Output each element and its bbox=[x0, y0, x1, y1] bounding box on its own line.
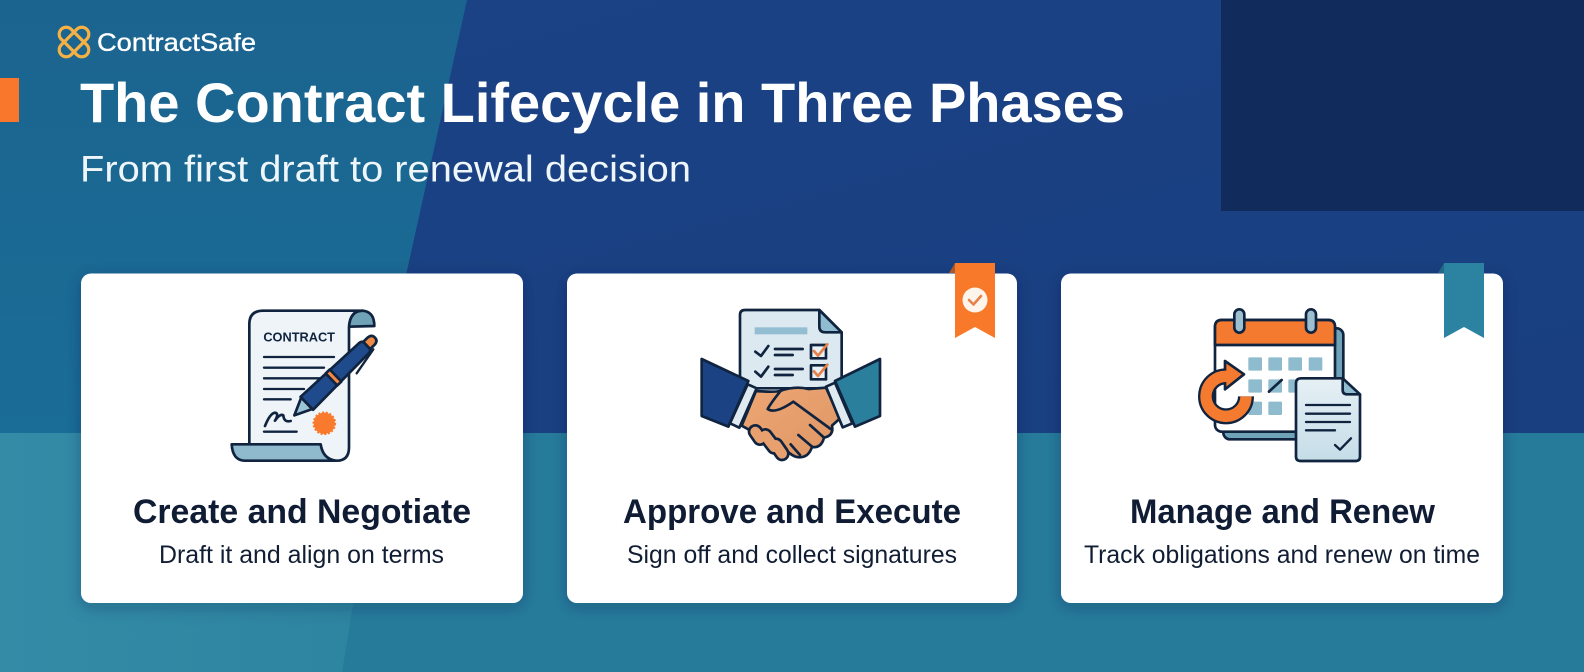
panel: create and negotiate bbox=[81, 274, 523, 603]
card description: Track obligations and renew on time bbox=[1084, 541, 1480, 569]
icon: contract and pen bbox=[232, 311, 381, 461]
card description: Sign off and collect signatures bbox=[627, 541, 957, 569]
card description: Draft it and align on terms bbox=[159, 541, 444, 569]
logo mark bbox=[56, 24, 92, 60]
icon: handshake and checklist bbox=[702, 310, 880, 457]
card title: Create and Negotiate bbox=[133, 493, 471, 531]
card background bbox=[81, 274, 523, 603]
card background bbox=[1061, 274, 1503, 603]
subtitle: From first draft to renewal decision bbox=[80, 148, 691, 190]
card title: Approve and Execute bbox=[623, 493, 961, 531]
panel: approve and execute bbox=[567, 263, 1017, 603]
panel: manage and renew bbox=[1061, 263, 1503, 603]
logo bbox=[56, 24, 256, 60]
icon: calendar and renewal bbox=[1206, 309, 1360, 461]
card title: Manage and Renew bbox=[1130, 493, 1436, 531]
title: The Contract Lifecycle in Three Phases bbox=[80, 71, 1125, 134]
ribbon: teal bookmark bbox=[1438, 263, 1484, 338]
badge check bbox=[962, 288, 988, 312]
logo wordmark: ContractSafe bbox=[97, 29, 256, 57]
icon: contract and pen: CONTRACT bbox=[263, 331, 335, 345]
card background bbox=[567, 274, 1017, 603]
accent bar bbox=[0, 78, 19, 122]
ribbon: orange badge bbox=[949, 263, 995, 338]
